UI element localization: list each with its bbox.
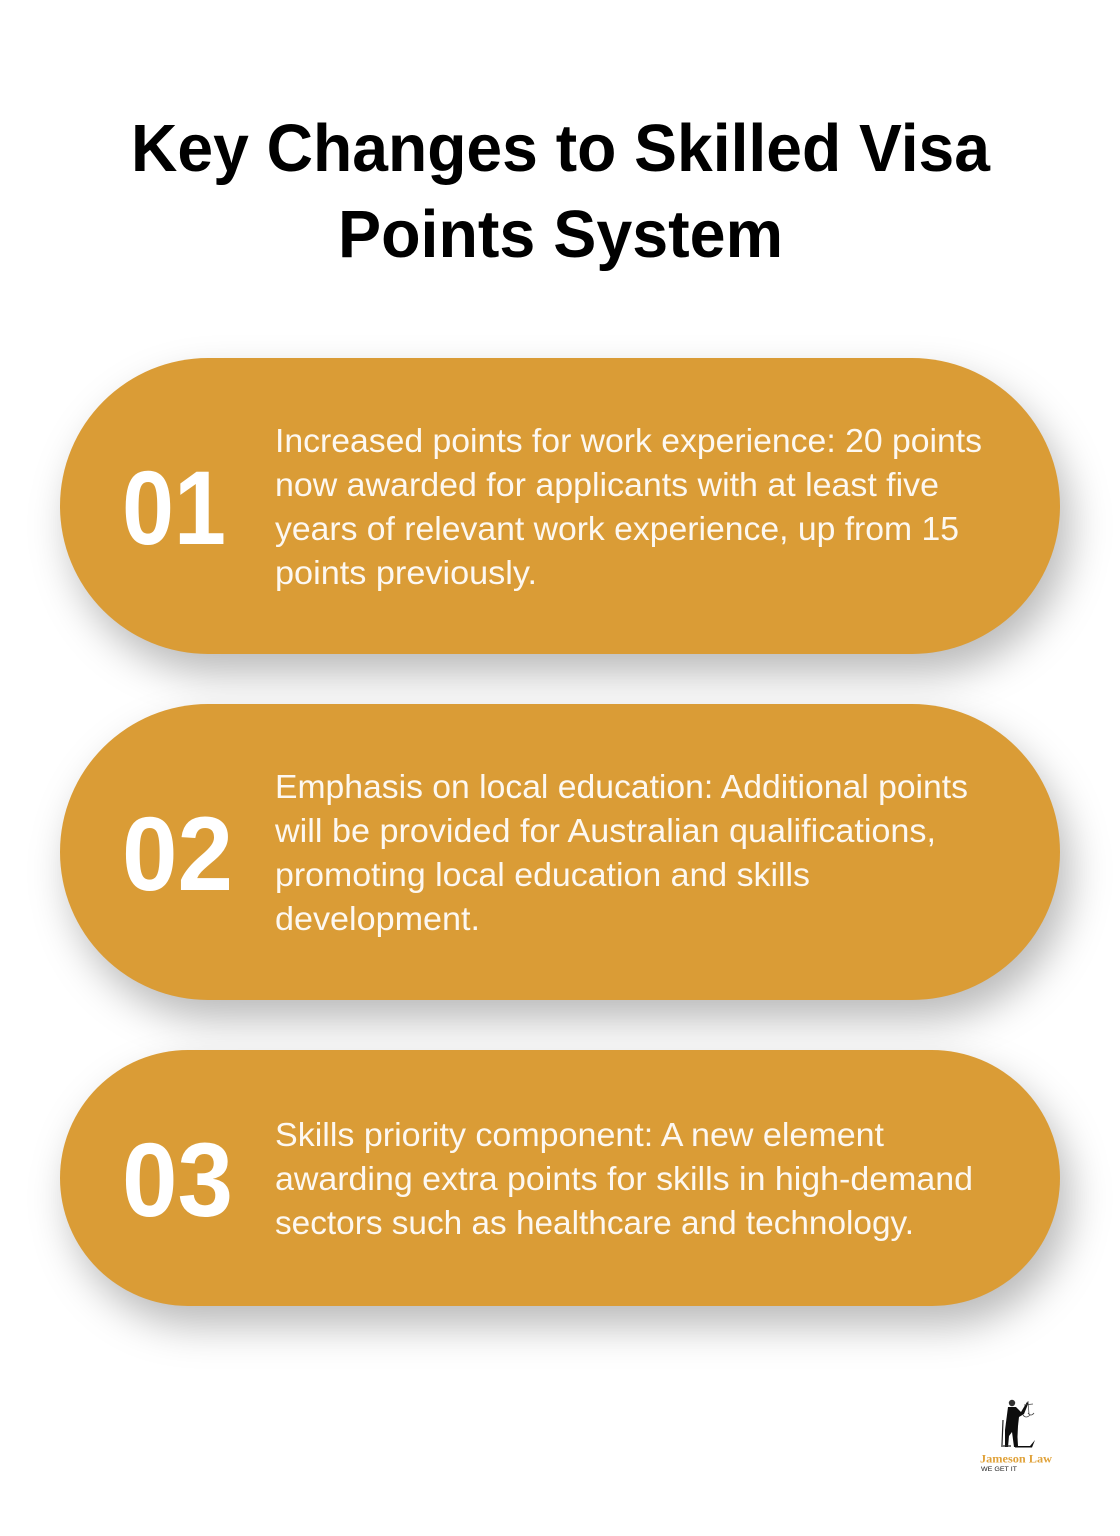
panel: card 03 skills priority bbox=[60, 1050, 1070, 1326]
panel: card 02 local education: promoting local education and skills bbox=[275, 856, 810, 893]
panel: card 02 local education: 02 bbox=[122, 796, 233, 913]
panel: card 03 skills priority: Skills priority component: A new element bbox=[275, 1116, 884, 1153]
panel: card 02 local education: development. bbox=[275, 900, 480, 937]
panel: card 03 skills priority: sectors such as healthcare and technology. bbox=[275, 1204, 914, 1241]
panel: card 01 work experience: points previously. bbox=[275, 554, 537, 591]
panel: card 03 skills priority: 03 bbox=[122, 1122, 233, 1239]
brand name: Jameson Law bbox=[980, 1454, 1053, 1466]
panel: card 01 work experience: Increased points for work experience: 20 points bbox=[275, 422, 982, 459]
panel: card 02 local education: Emphasis on local education: Additional points bbox=[275, 768, 968, 805]
title: Key Changes to Skilled Visa bbox=[131, 111, 991, 186]
panel: card 01 work experience bbox=[60, 358, 1070, 674]
title: Points System bbox=[338, 197, 783, 272]
panel: card 01 work experience: years of relevant work experience, up from 15 bbox=[275, 510, 959, 547]
panel: card 01 work experience: 01 bbox=[122, 450, 226, 567]
logo: Jameson Law bbox=[980, 1400, 1053, 1473]
panel: card 03 skills priority: awarding extra points for skills in high-demand bbox=[275, 1160, 973, 1197]
title bbox=[131, 111, 991, 272]
panel: card 01 work experience: now awarded for applicants with at least five bbox=[275, 466, 939, 503]
panel: card 02 local education bbox=[60, 704, 1070, 1020]
icon: lady justice bbox=[1001, 1400, 1035, 1448]
tagline: WE GET IT bbox=[981, 1466, 1017, 1473]
panel: card 02 local education: will be provided for Australian qualifications, bbox=[274, 812, 936, 849]
